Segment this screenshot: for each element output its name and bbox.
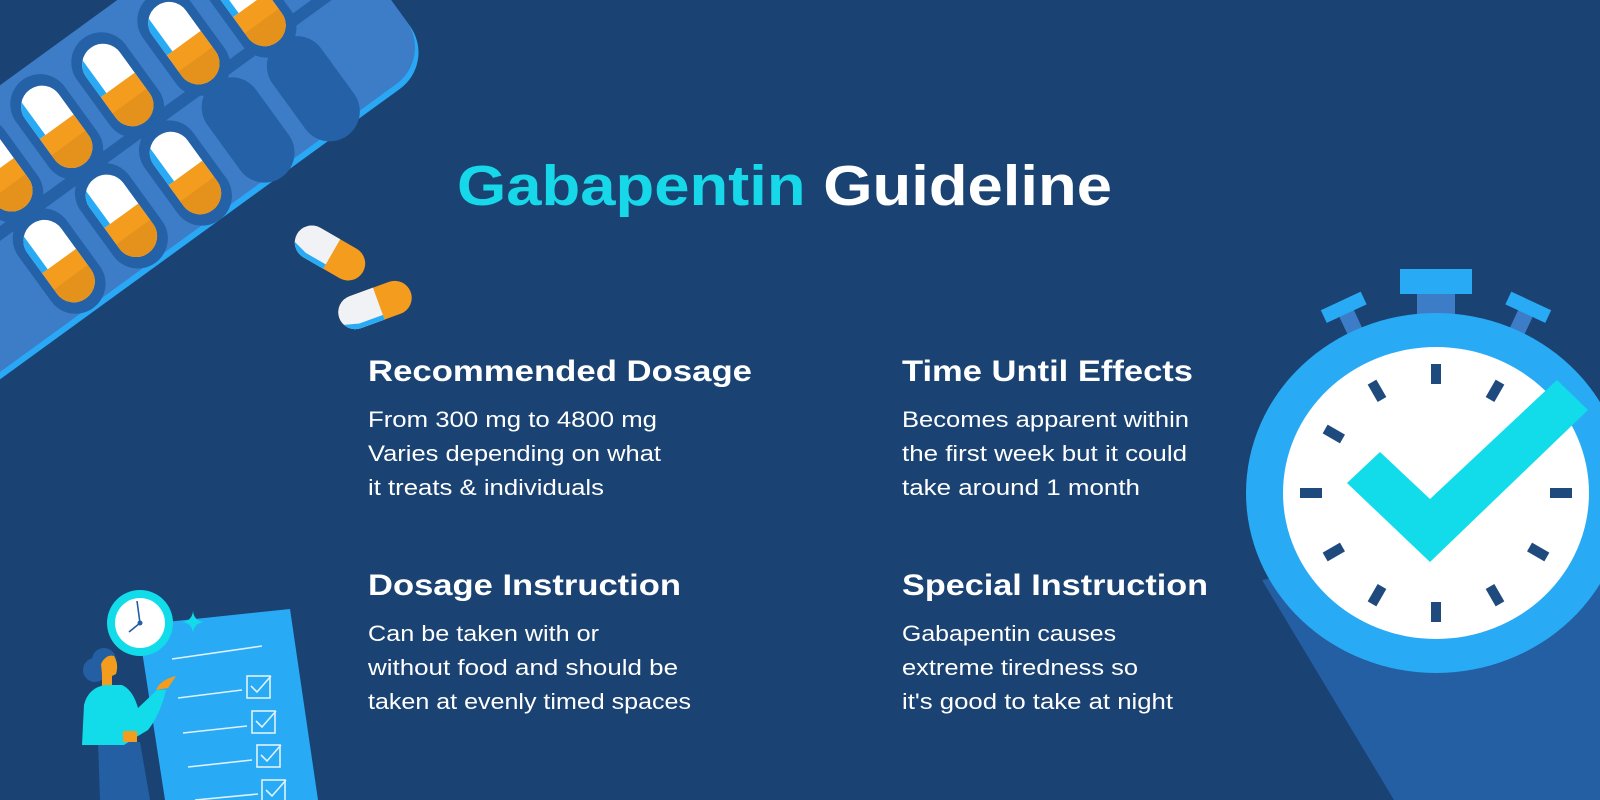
body [82,685,166,745]
clipboard [138,609,318,800]
title: Gabapentin Guideline [457,154,1112,218]
section: special instruction: extreme tiredness so [902,655,1138,680]
section: recommended dosage: Varies depending on what [368,441,661,466]
section: special instruction: it's good to take at night [902,689,1173,714]
section: time until effects: Becomes apparent within [902,407,1189,432]
person with checklist [82,590,318,800]
section: time until effects: take around 1 month [902,475,1140,500]
section: special instruction: Gabapentin causes [902,621,1116,646]
sparkle [182,611,204,633]
section: time until effects: Time Until Effects [902,355,1193,388]
section: dosage instruction: Can be taken with or [368,621,599,646]
hands [156,676,176,690]
section: recommended dosage: it treats & individuals [368,475,604,500]
section: dosage instruction [367,569,691,714]
section: special instruction: Special Instruction [902,569,1208,602]
stopwatch [1246,269,1600,800]
loose pill 1 [289,219,371,287]
hair [83,658,107,682]
section: time until effects [902,355,1193,500]
section: recommended dosage: From 300 mg to 4800 mg [368,407,657,432]
loose pill 2 [333,276,417,334]
section: recommended dosage: Recommended Dosage [368,355,752,388]
section: time until effects: the first week but it could [902,441,1187,466]
check mark [1347,380,1588,562]
section: recommended dosage [368,355,752,500]
section: dosage instruction: without food and should be [367,655,678,680]
section: special instruction [902,569,1208,714]
section: dosage instruction: Dosage Instruction [368,569,681,602]
section: dosage instruction: taken at evenly timed spaces [368,689,691,714]
legs [98,742,150,800]
blister pack [0,0,440,500]
face [101,656,117,688]
clock [107,590,173,656]
